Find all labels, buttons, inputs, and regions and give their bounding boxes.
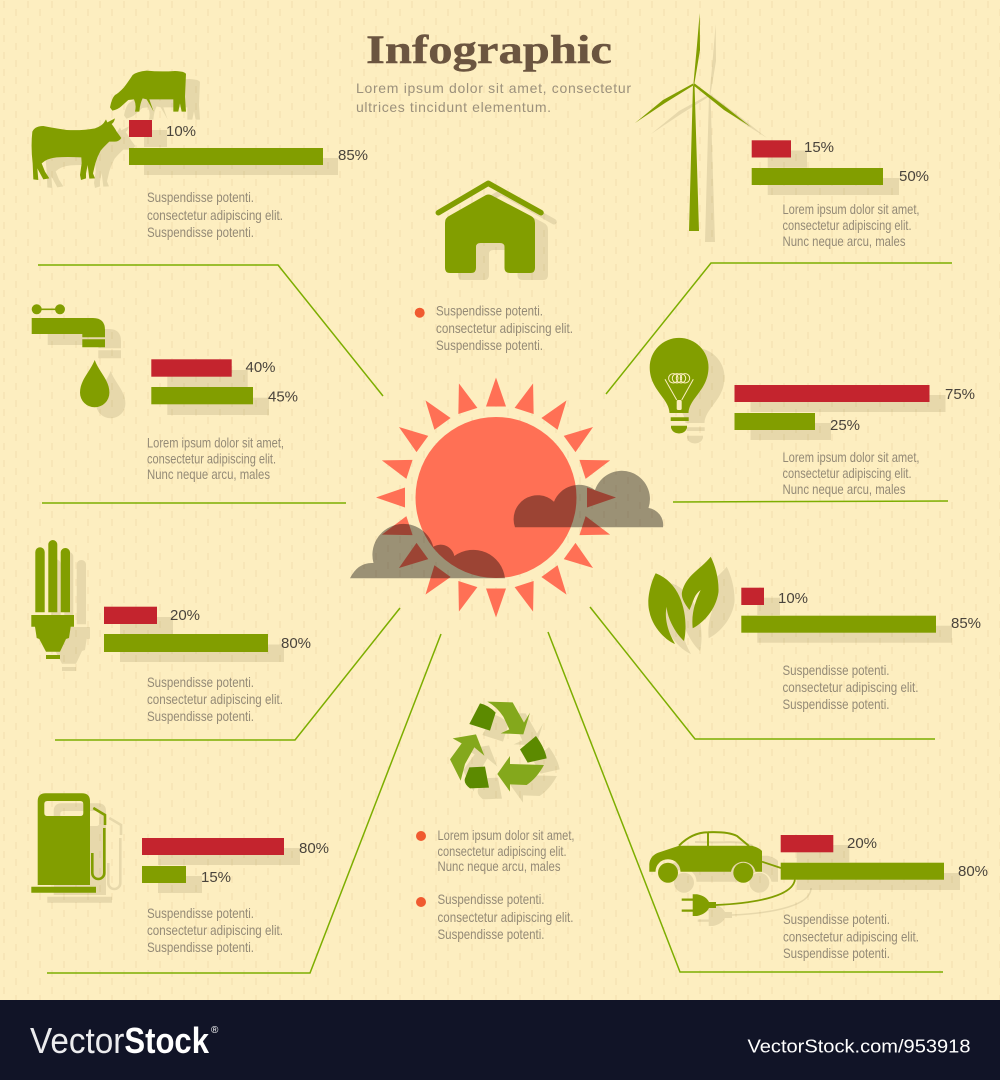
text block: wind: consectetur adipiscing elit. <box>782 217 912 233</box>
text block: bulb: consectetur adipiscing elit. <box>782 465 912 481</box>
bar chart: car: 20% <box>847 835 877 852</box>
bar chart: water: 40% <box>246 359 276 376</box>
bar chart: bulb <box>734 385 975 440</box>
text block: bulb: Nunc neque arcu, males <box>782 481 906 497</box>
image id: VectorStock.com/953918 <box>748 1036 970 1057</box>
text block: bulb <box>782 449 920 497</box>
text block: house: consectetur adipiscing elit. <box>436 320 573 336</box>
text block: recycling first: Lorem ipsum dolor sit amet, <box>438 827 574 843</box>
text block: fuel: consectetur adipiscing elit. <box>147 922 283 938</box>
text block: recycling second: Suspendisse potenti. <box>438 926 544 942</box>
bar chart: lamp <box>104 607 311 662</box>
panel: wind turbine <box>635 13 929 249</box>
icon: sun and clouds <box>350 378 663 618</box>
bar chart: fuel <box>142 838 329 893</box>
text block: wind: Nunc neque arcu, males <box>782 233 906 249</box>
bar chart: water <box>151 359 298 415</box>
text block: cows: consectetur adipiscing elit. <box>147 207 283 223</box>
text block: cows: Suspendisse potenti. <box>147 224 254 240</box>
icon: wind turbine <box>635 13 767 242</box>
text block: water: consectetur adipiscing elit. <box>147 450 276 466</box>
title: Infographic <box>366 27 612 72</box>
bar chart: cows <box>129 120 368 175</box>
text block: wind <box>782 201 920 249</box>
text block: recycling first: Nunc neque arcu, males <box>438 858 560 874</box>
text block: leaves: consectetur adipiscing elit. <box>782 679 918 695</box>
text block: car: Suspendisse potenti. <box>783 911 890 927</box>
icon: leaves <box>648 557 735 654</box>
text block: lamp: Suspendisse potenti. <box>147 674 254 690</box>
logo: VectorStock: ® <box>211 1025 219 1036</box>
text block: water <box>147 434 284 482</box>
text block: cows: Suspendisse potenti. <box>147 189 254 205</box>
text block: water: Lorem ipsum dolor sit amet, <box>147 434 284 450</box>
text block: leaves <box>782 662 918 712</box>
logo: VectorStock: Stock <box>124 1020 210 1061</box>
icon: faucet and drop <box>32 304 125 418</box>
subtitle: Lorem ipsum dolor sit amet, consectetur <box>356 80 631 96</box>
text block: lamp <box>147 674 283 724</box>
text block: recycling second: consectetur adipiscing elit. <box>438 909 574 925</box>
text block: fuel: Suspendisse potenti. <box>147 905 254 921</box>
icon: energy saving lamp <box>31 540 90 671</box>
icon: house <box>438 183 554 280</box>
icon: light bulb <box>650 338 724 444</box>
panel: energy saving lamp <box>31 540 311 724</box>
panel: light bulb <box>650 338 975 497</box>
text block: house: Suspendisse potenti. <box>436 302 543 318</box>
footer bar <box>0 1000 1000 1080</box>
text block: fuel: Suspendisse potenti. <box>147 939 254 955</box>
bar chart: lamp: 80% <box>281 635 311 652</box>
connector lines <box>38 263 952 973</box>
text block: bulb: Lorem ipsum dolor sit amet, <box>782 449 920 465</box>
bar chart: leaves <box>741 588 981 643</box>
logo: VectorStock: Vector <box>30 1020 124 1061</box>
bar chart: cows: 85% <box>338 147 368 164</box>
text block: wind: Lorem ipsum dolor sit amet, <box>782 201 920 217</box>
panel: cows <box>32 71 368 240</box>
icon: fuel pump <box>31 793 121 903</box>
text block: lamp: consectetur adipiscing elit. <box>147 691 283 707</box>
bar chart: fuel: 80% <box>299 840 329 857</box>
bar chart: lamp: 20% <box>170 607 200 624</box>
panel: fuel pump <box>31 793 329 955</box>
sun disc <box>416 417 576 578</box>
panel: water <box>32 304 298 482</box>
subtitle: ultrices tincidunt elementum. <box>356 99 551 115</box>
panel: recycling <box>416 702 574 942</box>
text block: fuel <box>147 905 283 955</box>
text block: car <box>783 911 919 961</box>
panel: leaves <box>648 557 981 712</box>
bar chart: wind: 15% <box>804 139 834 156</box>
bar chart: leaves: 10% <box>778 590 808 607</box>
text block: water: Nunc neque arcu, males <box>147 466 270 482</box>
bullet <box>416 897 426 907</box>
bar chart: car: 80% <box>958 863 988 880</box>
panel: house <box>415 183 573 353</box>
bar chart: leaves: 85% <box>951 615 981 632</box>
text block: house: Suspendisse potenti. <box>436 337 543 353</box>
sun rays <box>376 378 616 618</box>
icon: cows <box>32 71 200 188</box>
bar chart: bulb: 25% <box>830 417 860 434</box>
text block: leaves: Suspendisse potenti. <box>782 696 890 712</box>
text block: cows <box>147 189 283 240</box>
text block: recycling first <box>438 827 574 874</box>
text block: leaves: Suspendisse potenti. <box>782 662 890 678</box>
text block: car: consectetur adipiscing elit. <box>783 928 919 944</box>
text block: lamp: Suspendisse potenti. <box>147 708 254 724</box>
bullet <box>415 308 425 318</box>
bar chart: wind <box>752 139 929 195</box>
bullet <box>416 831 426 841</box>
bar chart: wind: 50% <box>899 168 929 185</box>
cloud right <box>514 471 663 527</box>
text block: recycling first: consectetur adipiscing elit. <box>438 843 566 859</box>
text block: car: Suspendisse potenti. <box>783 945 890 961</box>
bar chart: fuel: 15% <box>201 869 231 886</box>
bar chart: car <box>781 835 988 890</box>
text block: house <box>436 302 573 353</box>
icon: recycling <box>450 702 560 803</box>
text block: recycling second: Suspendisse potenti. <box>438 891 544 907</box>
subtitle <box>356 80 631 115</box>
panel: electric car <box>649 832 988 961</box>
logo: VectorStock <box>30 1020 219 1061</box>
bar chart: bulb: 75% <box>945 386 975 403</box>
cloud left <box>350 524 505 578</box>
icon: electric car <box>649 832 811 926</box>
text block: recycling second <box>438 891 574 942</box>
bar chart: cows: 10% <box>166 123 196 140</box>
bar chart: water: 45% <box>268 388 298 406</box>
